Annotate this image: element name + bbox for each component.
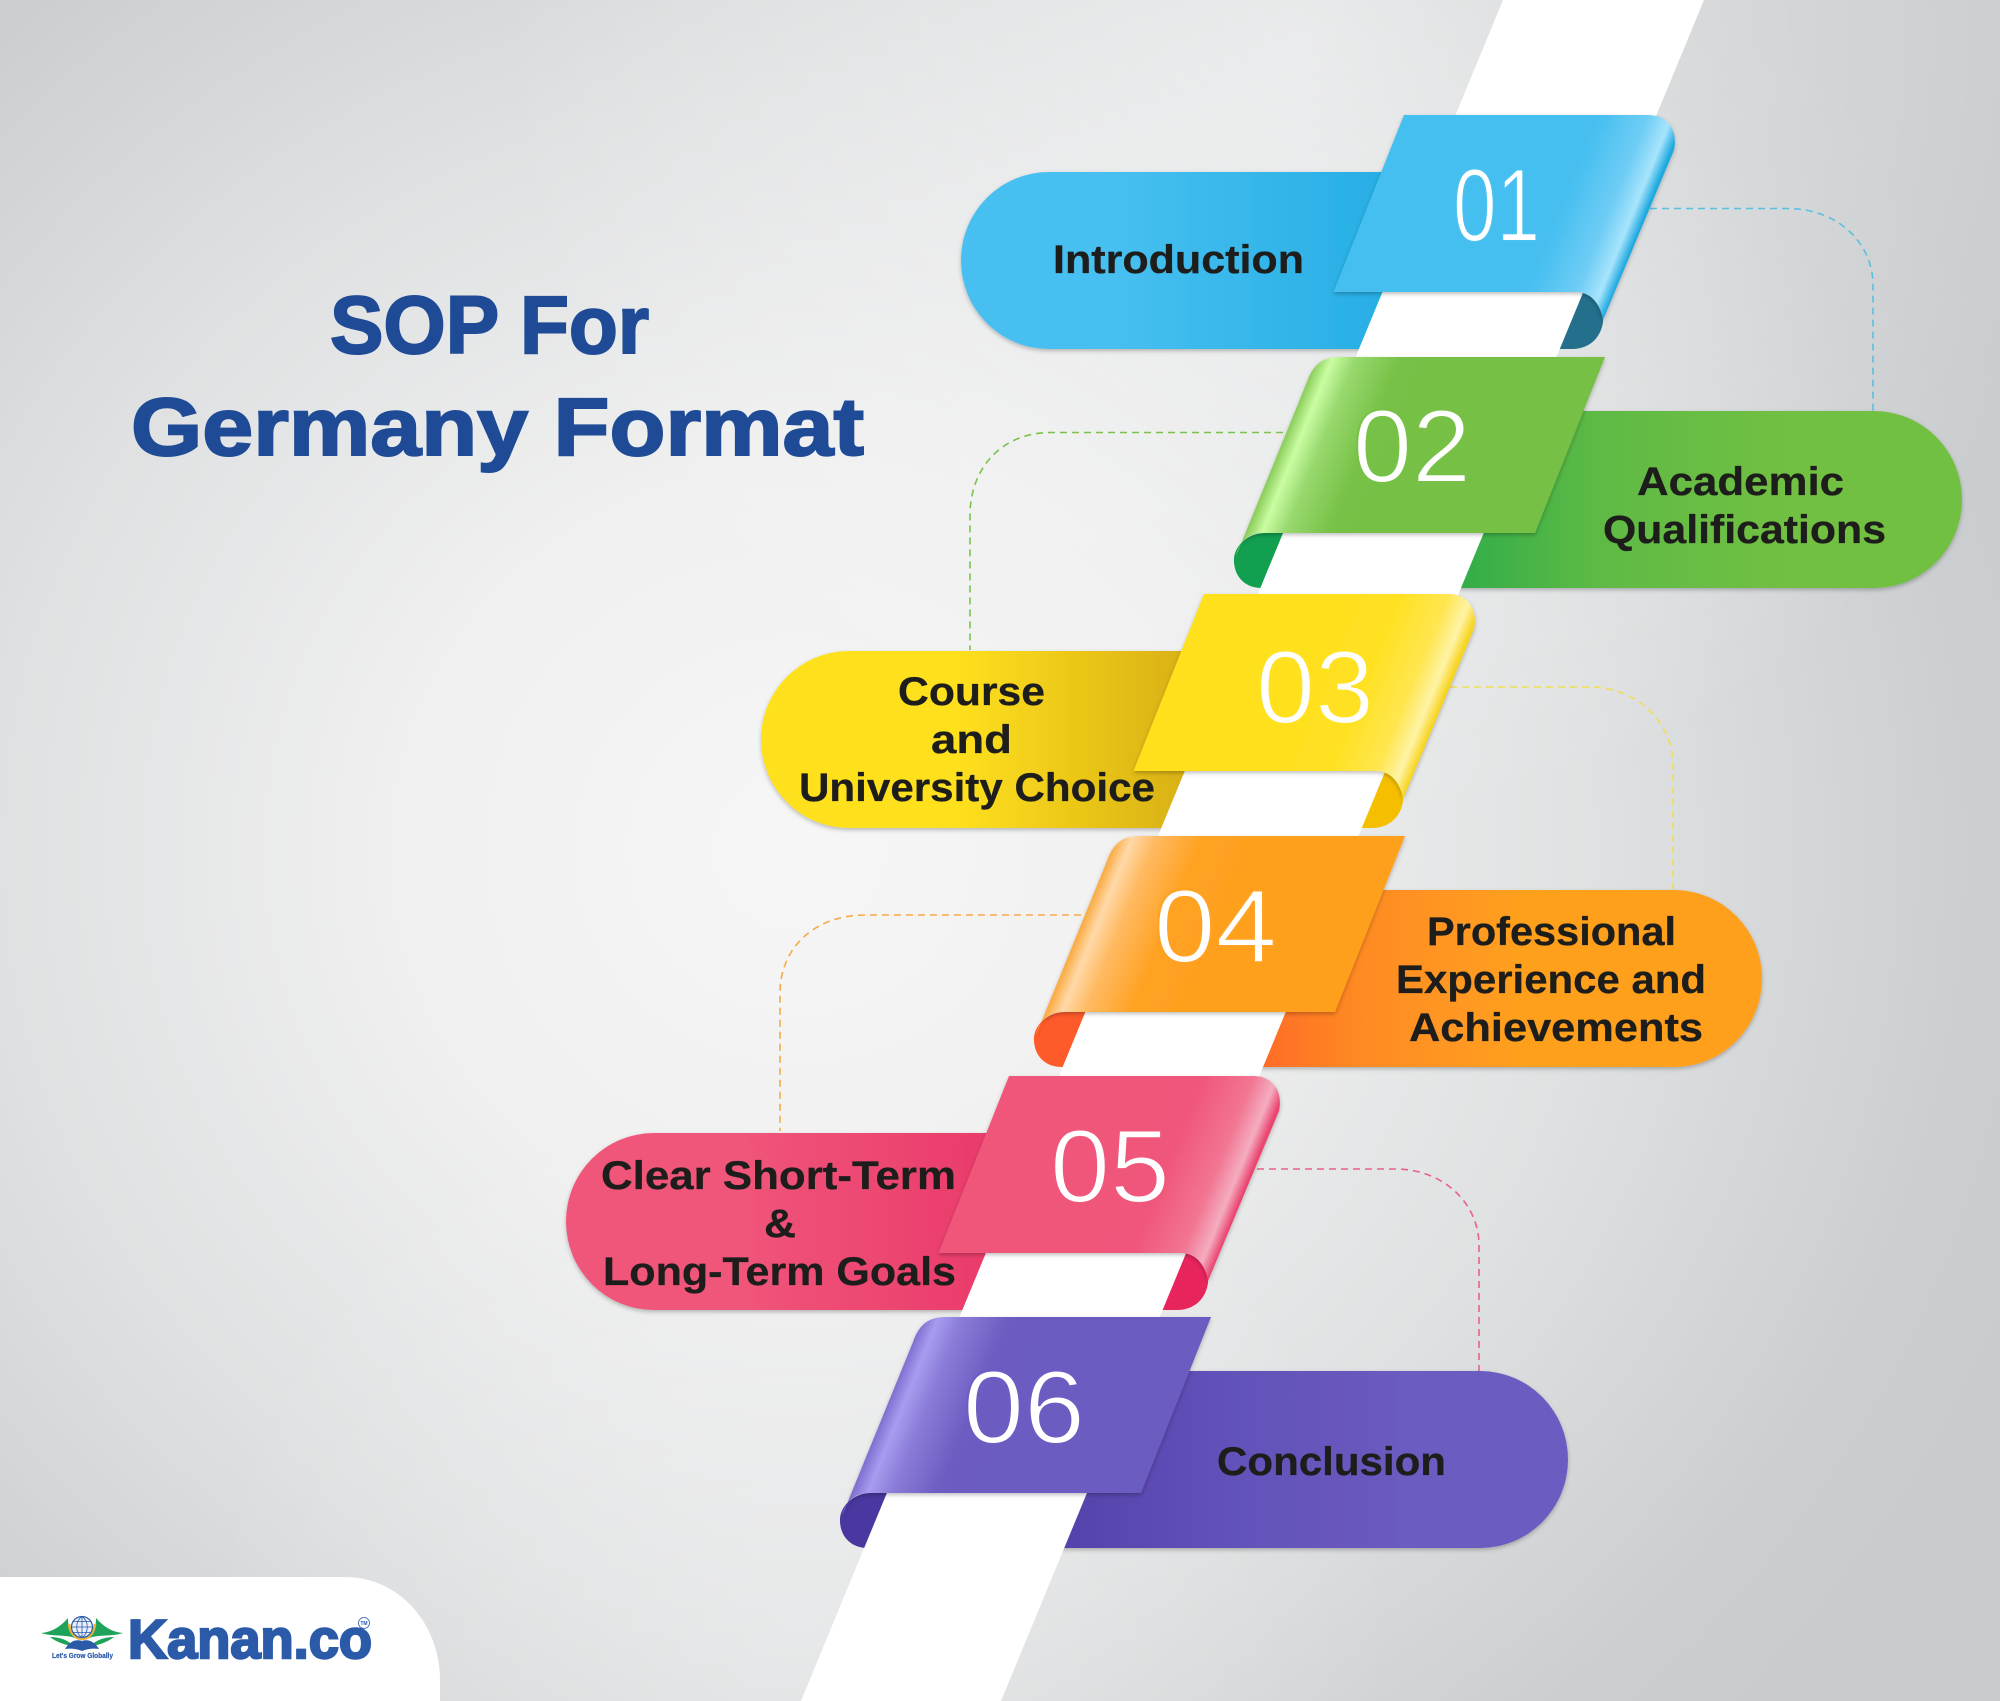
label: Professional Experience and Achievements [1396, 910, 1706, 1050]
pill 06 [936, 1371, 1568, 1548]
number 04: 04 [1154, 869, 1277, 985]
dashed connector 04 to 05 [780, 915, 1081, 1131]
label: Course and University Choice: Course [898, 670, 1045, 714]
label: Professional Experience and Achievements: Experience and [1396, 958, 1706, 1002]
pill 01 [961, 172, 1450, 349]
number tab 05 [938, 1076, 1280, 1281]
label: Academic Qualifications [1603, 460, 1886, 552]
number 03: 03 [1256, 630, 1374, 746]
logo tagline: Let's Grow Globally [52, 1653, 113, 1660]
pill 05 [566, 1133, 1055, 1310]
label: Conclusion: Conclusion [1217, 1440, 1446, 1484]
number 05: 05 [1050, 1109, 1170, 1225]
dashed connector 01 to 02 [1650, 208, 1873, 411]
title: SOP For [330, 280, 649, 371]
label: Clear Short-Term & Long-Term Goals: Clear Short-Term [601, 1154, 956, 1198]
ribbon fold 06 [840, 1493, 906, 1548]
dashed connector 05 to 06 [1257, 1169, 1479, 1371]
title: Germany Format [131, 382, 864, 473]
number 02: 02 [1353, 389, 1471, 505]
label: Clear Short-Term & Long-Term Goals: Long-Term Goals [603, 1250, 956, 1294]
number tab 02 [1236, 357, 1605, 556]
pill 02 [1330, 411, 1962, 588]
number tab 06 [842, 1317, 1211, 1516]
label: Academic Qualifications: Qualifications [1603, 508, 1886, 552]
white diagonal strip [801, 0, 1704, 1701]
label: Course and University Choice: University Choice [799, 766, 1155, 810]
dashed connector 02 to 03 [970, 432, 1283, 650]
label: Introduction: Introduction [1053, 238, 1304, 282]
pill 03 [761, 651, 1250, 828]
ribbon fold 03 [1340, 771, 1403, 828]
logo panel [0, 1577, 440, 1701]
number tab 03 [1134, 594, 1475, 799]
trademark mark: TM [360, 1621, 368, 1627]
ribbon fold 04 [1034, 1012, 1100, 1067]
title [131, 280, 864, 473]
number tab 01 [1334, 115, 1675, 320]
label: Professional Experience and Achievements: Professional [1427, 910, 1676, 954]
label: Professional Experience and Achievements: Achievements [1409, 1006, 1703, 1050]
ribbon fold 01 [1540, 292, 1603, 349]
label: Course and University Choice [799, 670, 1155, 810]
dashed connector 03 to 04 [1450, 687, 1673, 890]
icon: globe emblem with wings [41, 1616, 123, 1651]
number tab 04 [1036, 836, 1405, 1035]
pill 04 [1130, 890, 1762, 1067]
ribbon fold 05 [1145, 1253, 1208, 1310]
label: Academic Qualifications: Academic [1637, 460, 1844, 504]
ribbon fold 02 [1234, 533, 1300, 588]
label: Clear Short-Term & Long-Term Goals: & [764, 1202, 796, 1246]
label: Clear Short-Term & Long-Term Goals [601, 1154, 956, 1294]
label: Course and University Choice: and [931, 718, 1012, 762]
trademark mark [358, 1618, 370, 1628]
number 01: 01 [1453, 148, 1540, 264]
number 06: 06 [963, 1350, 1085, 1466]
logo wordmark: Kanan.co [128, 1608, 372, 1670]
